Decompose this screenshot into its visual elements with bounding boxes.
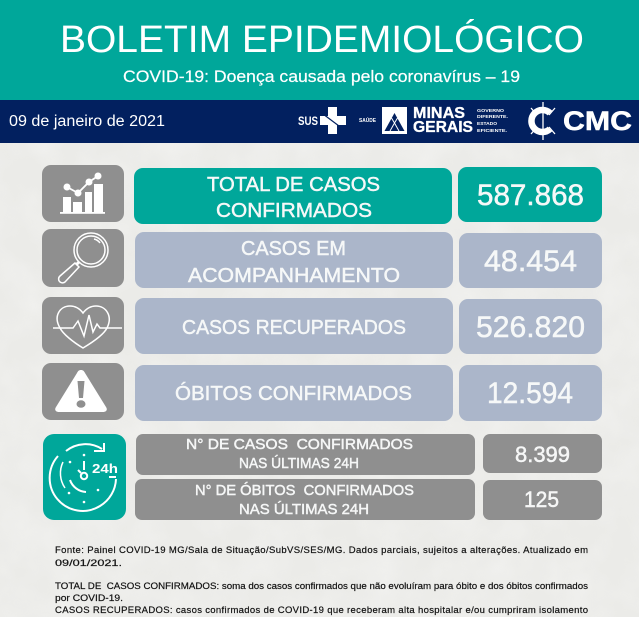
panel: casos recuperados: [135, 298, 453, 354]
panel: casos em acompanhamento: CASOS EM: [241, 238, 346, 260]
logo: Minas Gerais: GERAIS: [413, 119, 473, 136]
logo: CMC: [531, 102, 632, 140]
icon: 24h clock: 24h: [92, 462, 118, 476]
panel: obitos nas ultimas 24h: [135, 479, 475, 520]
panel: casos nas ultimas 24h: NAS ÚLTIMAS 24H: [239, 455, 359, 472]
footnotes text: Fonte: Painel COVID-19 MG/Sala de Situação/SubVS/SES/MG. Dados parciais, sujeitos a alterações. Atualizado em: [55, 545, 588, 556]
navy date and logos bar: [0, 100, 639, 143]
value: recuperados: 526.820: [476, 311, 585, 344]
icon: heart with pulse: [42, 297, 124, 354]
panel: obitos nas ultimas 24h: N° DE ÓBITOS CONFIRMADOS: [195, 482, 414, 499]
panel: casos nas ultimas 24h: N° DE CASOS CONFIRMADOS: [186, 437, 413, 453]
footnotes text: [55, 545, 588, 616]
panel: casos em acompanhamento: ACOMPANHAMENTO: [188, 265, 400, 287]
value: acompanhamento: [459, 233, 602, 288]
logo: Minas Gerais: DIFERENTE.: [477, 114, 508, 119]
footnotes text: 09/01/2021.: [55, 558, 122, 569]
value: acompanhamento: 48.454: [484, 245, 577, 278]
logo: CMC: CMC: [563, 106, 632, 136]
panel: casos em acompanhamento: [135, 232, 453, 288]
title: BOLETIM EPIDEMIOLÓGICO: [60, 18, 584, 61]
logo: Minas Gerais: SAÚDE: [359, 117, 377, 124]
logo: Minas Gerais: [359, 105, 508, 136]
header band: [0, 0, 639, 100]
panel: total de casos confirmados: TOTAL DE CASOS: [207, 174, 380, 196]
logo: SUS: [298, 107, 346, 134]
value: obitos 24h: 125: [524, 487, 559, 512]
footnotes text: por COVID-19.: [55, 593, 123, 604]
value: total de casos: [458, 167, 602, 222]
value: casos 24h: [483, 434, 602, 473]
logo: Minas Gerais: ESTADO: [477, 121, 498, 126]
panel: obitos confirmados: [135, 365, 453, 421]
logo: Minas Gerais: GOVERNO: [477, 108, 505, 113]
icon: 24h clock: [43, 434, 126, 520]
value: obitos: 12.594: [487, 377, 573, 410]
icon: magnifying glass: [42, 229, 124, 287]
date: 09 de janeiro de 2021: [9, 113, 165, 130]
subtitle: COVID-19: Doença causada pelo coronavírus – 19: [123, 67, 520, 86]
panel: casos nas ultimas 24h: [136, 434, 475, 475]
footnotes text: TOTAL DE CASOS CONFIRMADOS: soma dos casos confirmados que não evoluíram para óbito e dos óbitos confirmados: [55, 581, 588, 592]
panel: total de casos confirmados: CONFIRMADOS: [216, 200, 372, 222]
value: casos 24h: 8.399: [515, 442, 570, 467]
icon: warning triangle: [42, 363, 124, 420]
logo: Minas Gerais: EFICIENTE.: [477, 128, 507, 133]
logo: SUS: SUS: [298, 116, 318, 128]
panel: casos recuperados: CASOS RECUPERADOS: [182, 317, 406, 339]
value: obitos: [459, 365, 602, 421]
icon: bar chart with trend line: [42, 165, 124, 222]
panel: obitos confirmados: ÓBITOS CONFIRMADOS: [175, 382, 412, 405]
footnotes text: CASOS RECUPERADOS: casos confirmados de COVID-19 que receberam alta hospitalar e/ou cumpriram isolamento: [55, 605, 588, 616]
panel: obitos nas ultimas 24h: NAS ÚLTIMAS 24H: [239, 501, 369, 518]
value: obitos 24h: [483, 480, 602, 520]
logo: Minas Gerais: MINAS: [413, 105, 465, 122]
value: total de casos: 587.868: [477, 179, 584, 212]
panel: total de casos confirmados: [134, 168, 452, 224]
value: recuperados: [459, 299, 602, 354]
